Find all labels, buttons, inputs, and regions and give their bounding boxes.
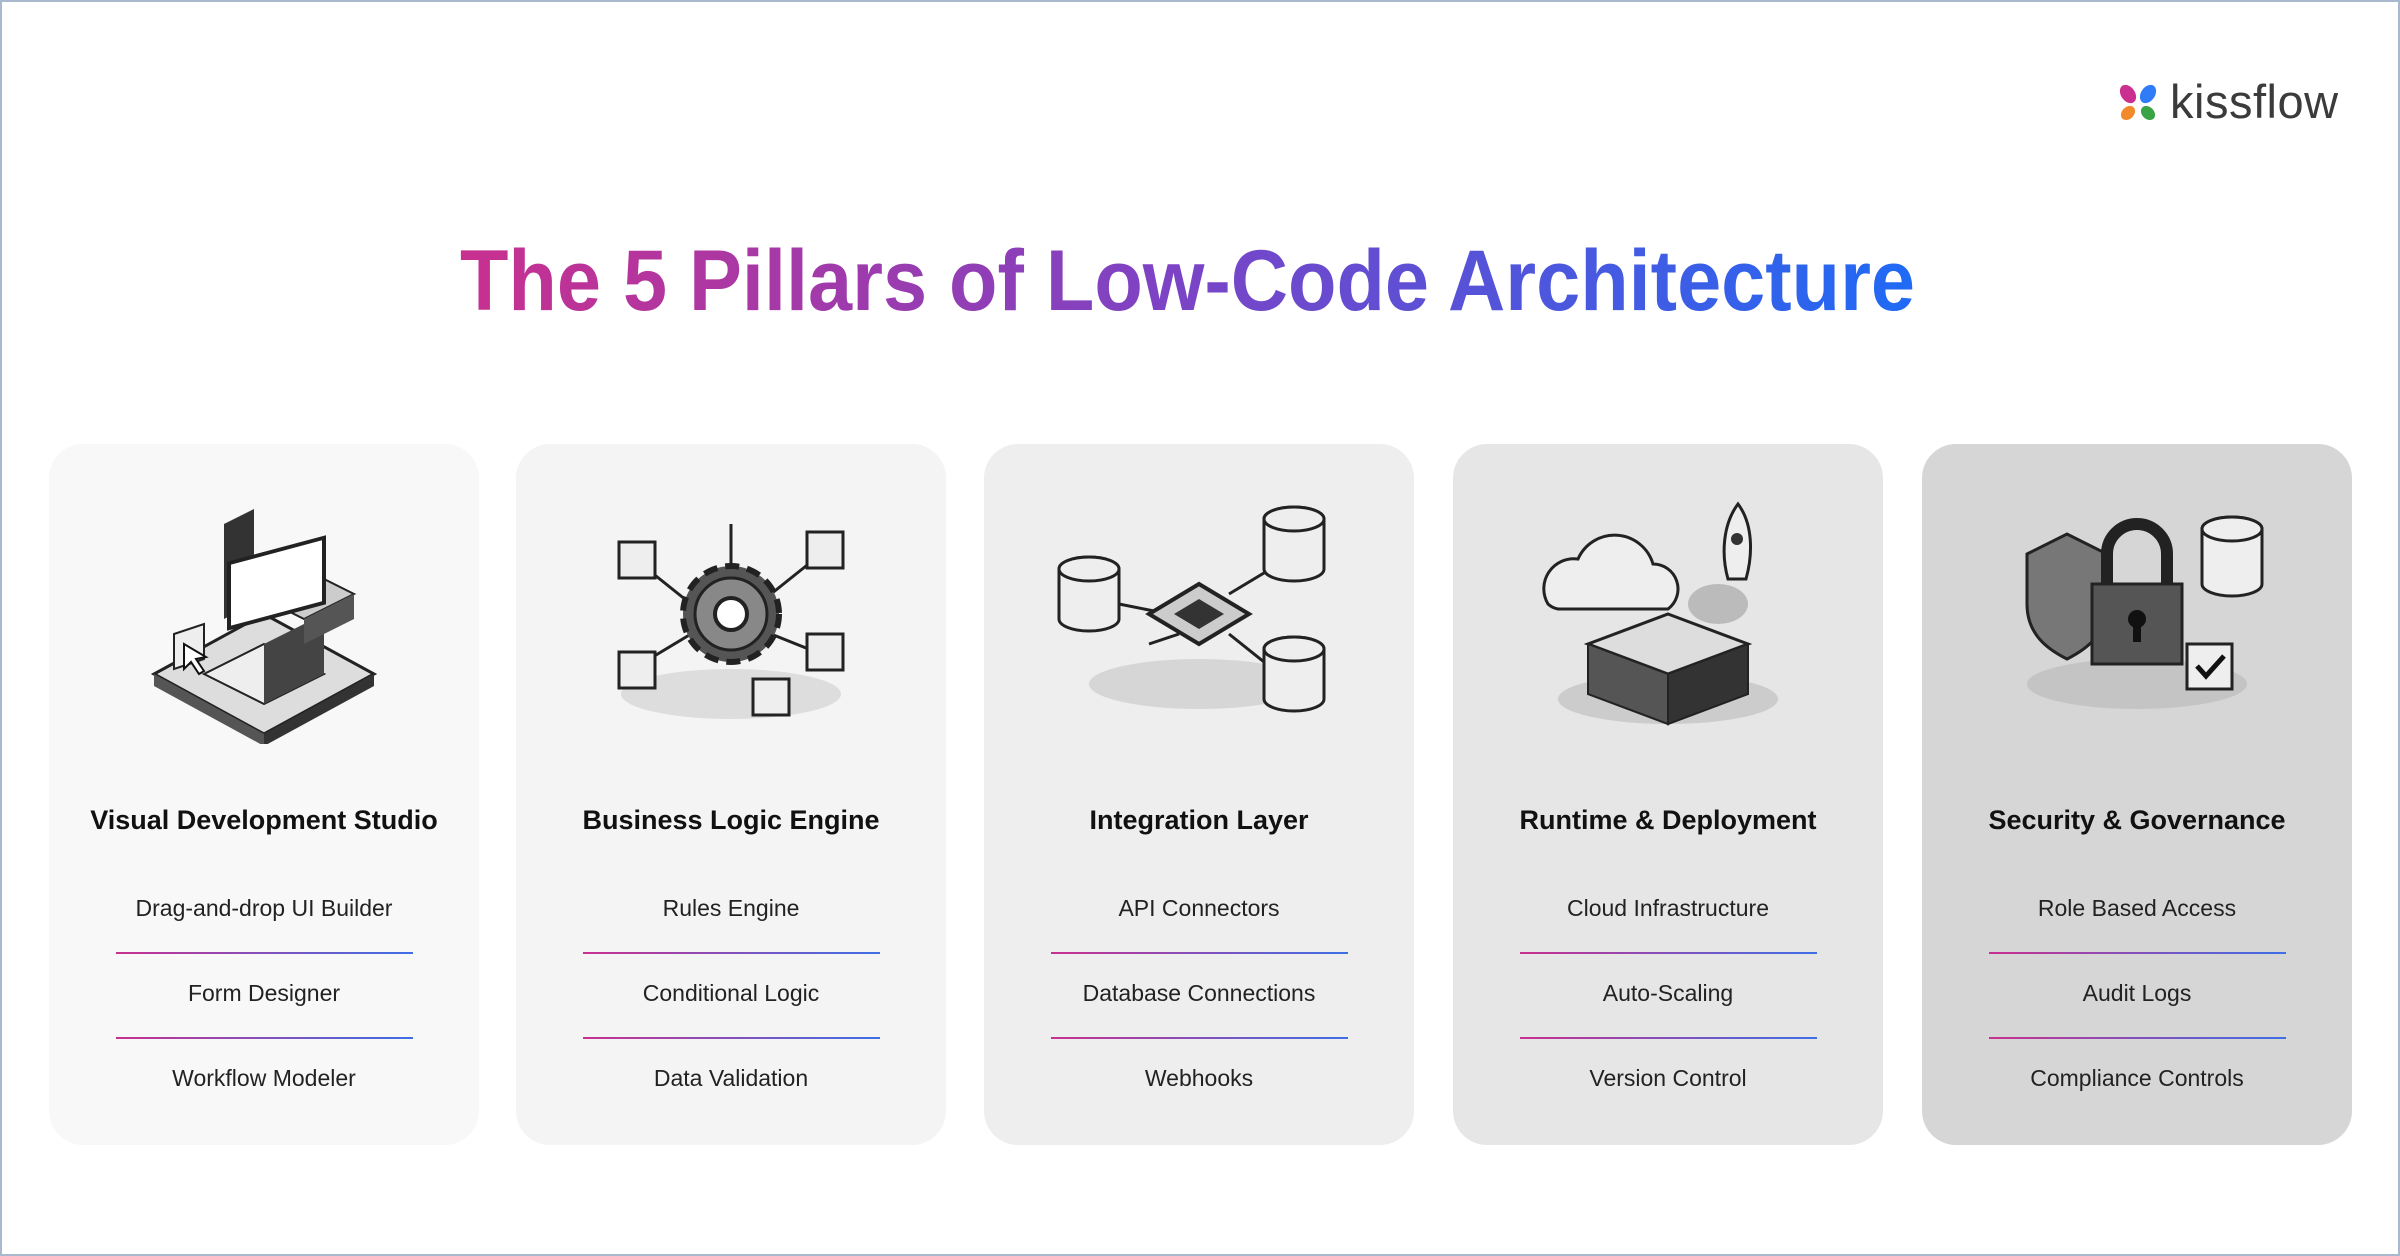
- list items: [583, 895, 880, 1091]
- list items: [1051, 895, 1348, 1091]
- panel: Runtime & Deployment: Version Control: [1589, 1065, 1747, 1091]
- logo: kissflow: kissflow: [2170, 75, 2339, 128]
- heading: Integration Layer: [1089, 805, 1309, 835]
- icon: logo petals: [2120, 84, 2156, 120]
- panel: Security & Governance: [1922, 444, 2352, 1145]
- panel: Security & Governance: Audit Logs: [2083, 980, 2191, 1006]
- panel: Security & Governance: Compliance Controls: [2030, 1065, 2244, 1091]
- panel: Visual Development Studio: Form Designer: [188, 980, 340, 1006]
- panel: Runtime & Deployment: Cloud Infrastructure: [1567, 895, 1769, 921]
- icon: shield, padlock, database: [2026, 516, 2264, 709]
- panel: Integration Layer: Webhooks: [1145, 1065, 1253, 1091]
- panel: Integration Layer: [984, 444, 1414, 1145]
- heading: Business Logic Engine: [582, 805, 880, 835]
- icon: chip with databases: [1058, 506, 1326, 712]
- icon: gear network: [618, 524, 844, 719]
- panel: Integration Layer: Database Connections: [1083, 980, 1315, 1006]
- icon: isometric UI blocks: [151, 509, 377, 744]
- panel: Business Logic Engine: [516, 444, 946, 1145]
- panel: Visual Development Studio: Drag-and-drop UI Builder: [136, 895, 392, 921]
- heading: Runtime & Deployment: [1519, 805, 1817, 835]
- list items: [1989, 895, 2286, 1091]
- panel: Business Logic Engine: Rules Engine: [663, 895, 799, 921]
- list items: [1520, 895, 1817, 1091]
- panel: Business Logic Engine: Data Validation: [654, 1065, 808, 1091]
- icon: cloud, server and rocket: [1542, 502, 1778, 726]
- panel: Visual Development Studio: [49, 444, 479, 1145]
- list items: [116, 895, 413, 1091]
- panel: Runtime & Deployment: [1453, 444, 1883, 1145]
- heading: Security & Governance: [1988, 805, 2286, 835]
- panel: Runtime & Deployment: Auto-Scaling: [1603, 980, 1733, 1006]
- title: The 5 Pillars of Low-Code Architecture: [460, 233, 1915, 329]
- panel: Business Logic Engine: Conditional Logic: [643, 980, 819, 1006]
- panel: Integration Layer: API Connectors: [1118, 895, 1280, 921]
- heading: Visual Development Studio: [90, 805, 438, 835]
- panel: Visual Development Studio: Workflow Modeler: [172, 1065, 356, 1091]
- panel: Security & Governance: Role Based Access: [2038, 895, 2236, 921]
